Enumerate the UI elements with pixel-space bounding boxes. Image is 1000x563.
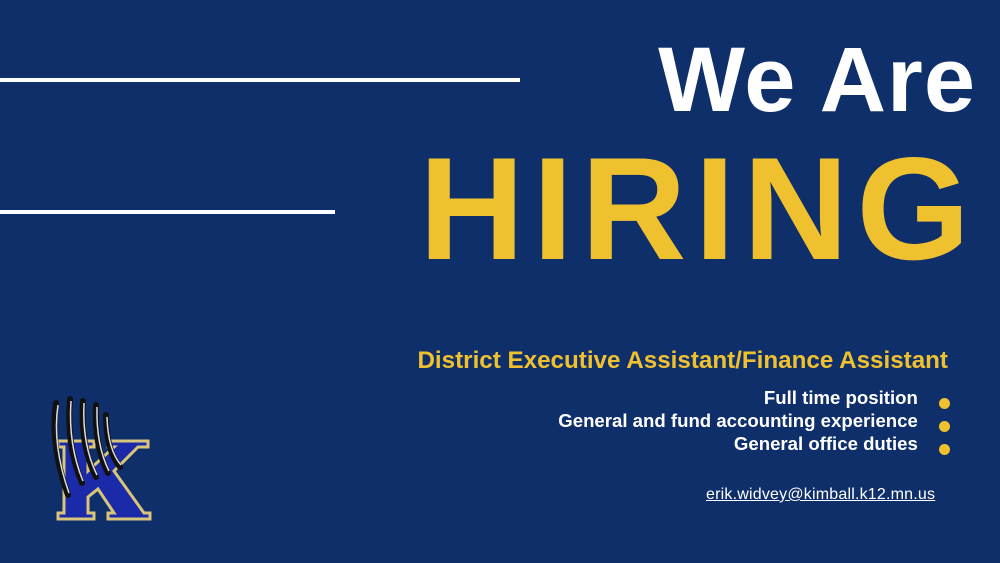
- email: erik.widvey@kimball.k12.mn.us: [706, 486, 935, 503]
- job title: District Executive Assistant/Finance Assistant: [417, 347, 948, 374]
- bullet list: Full time position: [764, 387, 918, 408]
- bullet list: General office duties: [734, 433, 918, 454]
- title: We Are: We Are: [658, 29, 976, 131]
- bullet list: [558, 387, 950, 455]
- decorative line top: [0, 78, 520, 82]
- icon: Kimball K logo with claws: [52, 396, 152, 520]
- bullet list: General and fund accounting experience: [558, 410, 918, 431]
- decorative line bottom: [0, 210, 335, 214]
- title: HIRING: HIRING: [419, 127, 978, 290]
